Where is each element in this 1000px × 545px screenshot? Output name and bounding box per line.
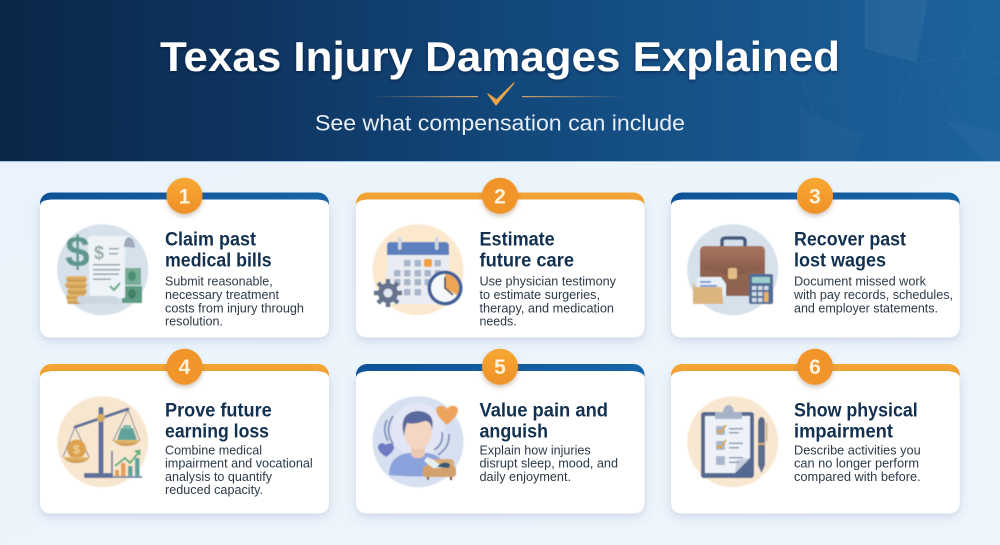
card 5 description: Explain how injuries	[480, 442, 591, 457]
page background	[0, 161, 1000, 545]
badge 1	[166, 178, 202, 214]
panel: card 5	[356, 349, 644, 514]
icon: briefcase, folder and calculator	[687, 224, 778, 315]
card 6 heading: Show physical	[794, 400, 918, 422]
card 6 description: Describe activities you	[794, 442, 921, 457]
icon: scales and growth chart	[57, 396, 148, 487]
subtitle: See what compensation can include	[315, 110, 685, 136]
card 1 heading	[165, 229, 272, 272]
header bottom edge	[0, 161, 1000, 162]
badge 4	[166, 349, 202, 385]
icon: calendar, clock and gear	[372, 224, 464, 315]
card 6 body	[671, 371, 960, 514]
card 4 description: impairment and vocational	[165, 456, 313, 471]
card 6 description	[794, 442, 921, 484]
card 2 heading: future care	[480, 250, 574, 272]
card 1 description	[165, 274, 304, 329]
card 4 description: Combine medical	[165, 442, 262, 457]
card 1 heading: Claim past	[165, 229, 256, 251]
badge 6: 6	[809, 356, 821, 379]
card 6 description: compared with before.	[794, 469, 921, 484]
badge 5: 5	[494, 356, 506, 379]
card 2 heading	[480, 229, 574, 272]
icon: clipboard and pen	[687, 396, 778, 487]
badge 2: 2	[494, 185, 506, 208]
card 3 description: and employer statements.	[794, 300, 938, 315]
card 2 description: therapy, and medication	[480, 300, 614, 315]
card 5 body	[356, 371, 644, 514]
badge 4: 4	[179, 356, 191, 379]
card 1 heading: medical bills	[165, 250, 272, 272]
card 1 bar	[40, 192, 329, 232]
card 4 heading	[165, 400, 272, 442]
card 6 bar	[671, 364, 960, 404]
card 2 description: Use physician testimony	[480, 274, 616, 289]
header banner	[0, 0, 1000, 161]
card 3 heading: lost wages	[794, 250, 886, 272]
divider line right	[522, 96, 625, 97]
card 3 heading	[794, 229, 906, 272]
card 2 description	[480, 274, 616, 329]
badge 2	[482, 178, 518, 214]
card 2 description: to estimate surgeries,	[480, 287, 600, 302]
card 3 bar	[671, 192, 960, 232]
title: Texas Injury Damages Explained	[160, 33, 840, 80]
card 6 description: can no longer perform	[794, 456, 919, 471]
card 4 description	[165, 442, 313, 497]
card 6 heading: impairment	[794, 420, 893, 442]
card 4 heading: Prove future	[165, 400, 272, 422]
card 4 body	[40, 371, 329, 514]
card 5 description	[480, 442, 618, 484]
icon: person, hearts and couch	[372, 396, 464, 487]
card 1 description: costs from injury through	[165, 300, 304, 315]
panel: card 2	[356, 178, 644, 338]
card 3 description: Document missed work	[794, 274, 926, 289]
card 3 body	[671, 200, 960, 338]
icon: medical bill and money: $	[94, 243, 104, 263]
icon: medical bill and money: $	[65, 228, 90, 277]
card 1 description: necessary treatment	[165, 287, 279, 302]
panel: card 6	[671, 349, 960, 514]
card 4 description: reduced capacity.	[165, 482, 263, 497]
card 3 heading: Recover past	[794, 229, 906, 251]
card 3 description: with pay records, schedules,	[793, 287, 953, 302]
card 5 description: disrupt sleep, mood, and	[480, 456, 618, 471]
card 4 bar	[40, 364, 329, 404]
card 3 description	[793, 274, 953, 315]
card 4 description: analysis to quantify	[165, 469, 272, 484]
icon: check mark	[488, 83, 514, 105]
icon: medical bill and money	[57, 224, 148, 315]
card 2 body	[356, 200, 644, 338]
card 5 heading: Value pain and	[480, 400, 608, 422]
card 1 description: resolution.	[165, 314, 223, 329]
badge 3	[797, 178, 833, 214]
card 2 heading: Estimate	[480, 229, 555, 251]
badge 3: 3	[809, 185, 821, 208]
panel: card 1	[40, 178, 329, 338]
card 1 description: Submit reasonable,	[165, 274, 273, 289]
card 5 description: daily enjoyment.	[480, 469, 571, 484]
card 6 heading	[794, 400, 918, 442]
card 5 heading	[480, 400, 608, 442]
card 5 heading: anguish	[480, 420, 548, 442]
icon: scales and growth chart: $	[73, 442, 80, 456]
card 5 bar	[356, 364, 644, 404]
panel: card 3	[671, 178, 960, 338]
card 2 bar	[356, 192, 644, 232]
panel: card 4	[40, 349, 329, 514]
card 4 heading: earning loss	[165, 420, 269, 442]
card 1 body	[40, 200, 329, 338]
badge 5	[482, 349, 518, 385]
card 2 description: needs.	[480, 314, 517, 329]
divider line left	[373, 96, 478, 97]
badge 6	[797, 349, 833, 385]
badge 1: 1	[179, 185, 191, 208]
